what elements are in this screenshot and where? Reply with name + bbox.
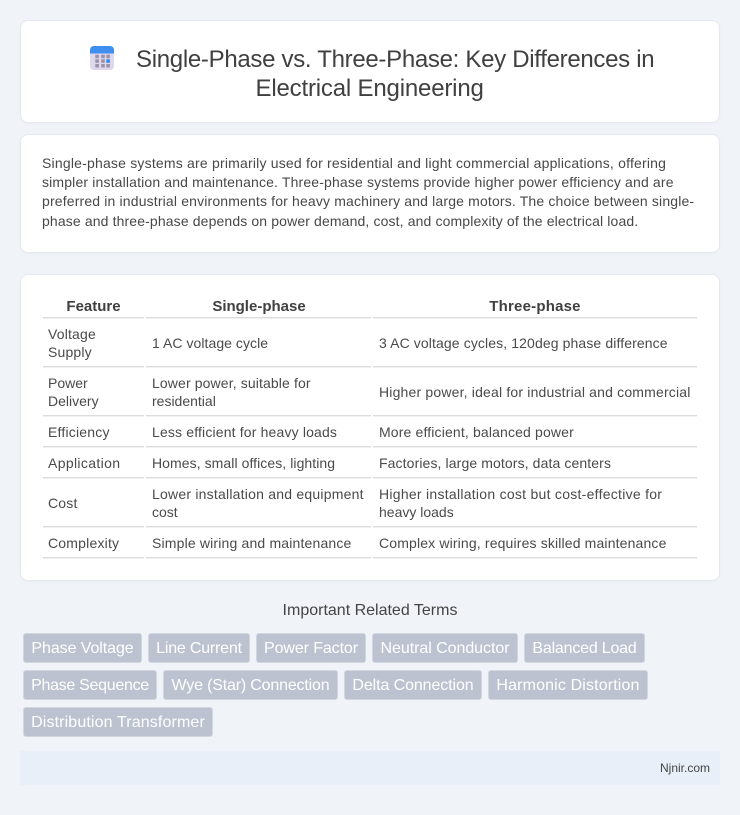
panel: intro bbox=[20, 134, 720, 253]
title: Single-Phase vs. Three-Phase: Key Differences in bbox=[136, 46, 654, 73]
table row: cost: Cost bbox=[48, 495, 78, 511]
table row: complexity: Complexity bbox=[48, 535, 119, 551]
table row: application: Application bbox=[48, 455, 120, 471]
table row: efficiency: Less efficient for heavy loads bbox=[152, 424, 337, 440]
table row: power delivery: Lower power, suitable for bbox=[152, 375, 311, 391]
table row: application bbox=[43, 455, 697, 479]
tag list: Delta Connection bbox=[352, 677, 474, 694]
tag list: Harmonic Distortion bbox=[496, 677, 640, 694]
title: Electrical Engineering bbox=[256, 75, 484, 102]
intro text: preferred in industrial environments for heavy machinery and large motors. The choice between single- bbox=[42, 193, 694, 209]
table row: complexity: Simple wiring and maintenance bbox=[152, 535, 351, 551]
tag list: Phase Voltage bbox=[31, 640, 134, 657]
footer credit: Njnir.com bbox=[660, 761, 710, 775]
table row: voltage supply: Supply bbox=[48, 344, 92, 360]
intro text: phase and three-phase depends on power demand, cost, and complexity of the electrical load. bbox=[42, 213, 638, 229]
panel: comparison table bbox=[20, 274, 720, 581]
intro text: Single-phase systems are primarily used for residential and light commercial applications, offering bbox=[42, 155, 666, 171]
title bbox=[136, 46, 654, 102]
tag list: Phase Sequence bbox=[31, 677, 149, 694]
heading: important related terms: Important Related Terms bbox=[283, 602, 457, 619]
tag list: Neutral Conductor bbox=[380, 640, 510, 657]
table row: voltage supply: Voltage bbox=[48, 326, 96, 342]
footer bbox=[20, 751, 720, 785]
table row: application: Homes, small offices, lighting bbox=[152, 455, 335, 471]
table row: application: Factories, large motors, data centers bbox=[379, 455, 611, 471]
table row: cost bbox=[43, 486, 697, 528]
tag list: Power Factor bbox=[264, 640, 358, 657]
table row: power delivery: residential bbox=[152, 393, 216, 409]
table row: power delivery: Power bbox=[48, 375, 88, 391]
tag list: Line Current bbox=[156, 640, 242, 657]
table header bbox=[43, 298, 697, 319]
table header: Three-phase bbox=[489, 298, 581, 315]
table row: complexity: Complex wiring, requires skilled maintenance bbox=[379, 535, 667, 551]
table row: voltage supply: 1 AC voltage cycle bbox=[152, 335, 268, 351]
table row: cost: heavy loads bbox=[379, 504, 454, 520]
table row: complexity bbox=[43, 535, 697, 559]
table row: power delivery: Delivery bbox=[48, 393, 99, 409]
table row: power delivery: Higher power, ideal for industrial and commercial bbox=[379, 384, 691, 400]
table row: cost: cost bbox=[152, 504, 178, 520]
table row: cost: Higher installation cost but cost-effective for bbox=[379, 486, 662, 502]
table row: voltage supply: 3 AC voltage cycles, 120deg phase difference bbox=[379, 335, 668, 351]
table row: cost: Lower installation and equipment bbox=[152, 486, 364, 502]
tag list: Balanced Load bbox=[532, 640, 637, 657]
table row: power delivery bbox=[43, 375, 697, 417]
tag list: Wye (Star) Connection bbox=[172, 677, 329, 694]
tag list: Distribution Transformer bbox=[31, 714, 205, 731]
table row: efficiency bbox=[43, 424, 697, 448]
tag list bbox=[23, 633, 648, 737]
intro text bbox=[42, 155, 694, 229]
table row: efficiency: More efficient, balanced power bbox=[379, 424, 574, 440]
table header: Single-phase bbox=[212, 298, 306, 315]
icon: calendar bbox=[90, 46, 114, 70]
table header: Feature bbox=[66, 298, 121, 315]
table row: voltage supply bbox=[43, 326, 697, 368]
panel: header bbox=[20, 20, 720, 123]
table row: efficiency: Efficiency bbox=[48, 424, 110, 440]
intro text: simpler installation and maintenance. Three-phase systems provide higher power efficiency and are bbox=[42, 174, 674, 190]
